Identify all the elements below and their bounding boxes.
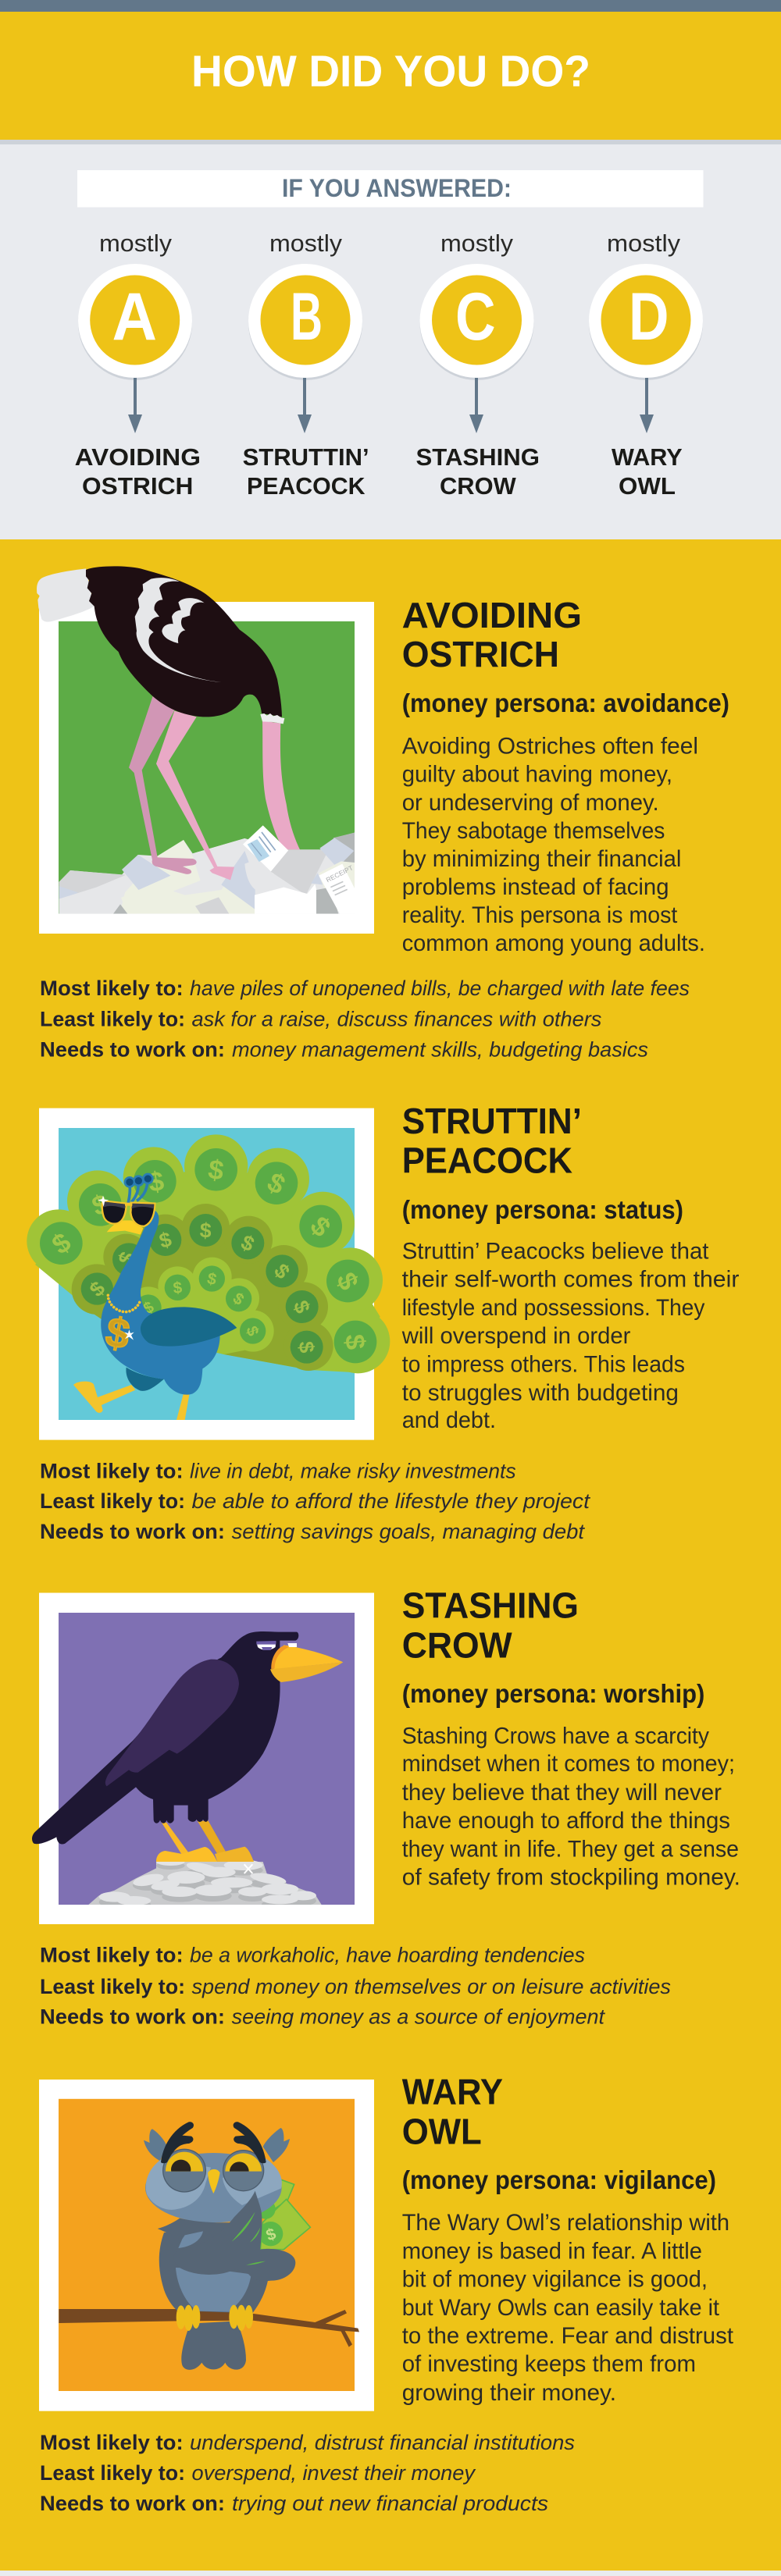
- traits list: [40, 1460, 591, 1543]
- wing: [105, 1660, 239, 1786]
- description: but Wary Owls can easily take it: [402, 2295, 720, 2321]
- beak: [270, 1645, 343, 1682]
- body: [32, 1631, 298, 1845]
- traits list: trying out new financial products: [232, 2492, 548, 2515]
- tail fan: $: [339, 1333, 371, 1350]
- gold chain: [102, 1295, 140, 1358]
- branch: [59, 2309, 359, 2347]
- illustration: crow on coin pile: [32, 1631, 343, 1909]
- beak: [107, 1220, 143, 1235]
- persona name: [402, 1585, 579, 1666]
- answer column D: [589, 229, 703, 500]
- body: [86, 566, 282, 717]
- crest: [124, 1173, 154, 1204]
- photo frame: crow: [39, 1592, 374, 1924]
- traits list: ask for a raise, discuss finances with others: [192, 1007, 601, 1030]
- traits list: Least likely to:: [40, 1007, 185, 1030]
- description: [402, 2210, 734, 2406]
- raised wing: [173, 2191, 295, 2281]
- answer column B: B: [291, 279, 323, 354]
- description: of safety from stockpiling money.: [402, 1865, 740, 1891]
- photo frame: owl: [39, 2080, 374, 2411]
- persona type: (money persona: worship): [402, 1679, 704, 1708]
- description: to the extreme. Fear and distrust: [402, 2323, 734, 2349]
- traits list: be able to afford the lifestyle they project: [192, 1489, 591, 1513]
- traits list: Most likely to:: [40, 977, 184, 1000]
- traits list: Needs to work on:: [40, 2005, 225, 2029]
- traits list: overspend, invest their money: [192, 2461, 476, 2485]
- body: [159, 2225, 276, 2313]
- panel: wary owl: [39, 2072, 734, 2515]
- panel: avoiding ostrich: [37, 566, 729, 1062]
- description: guilty about having money,: [402, 761, 672, 787]
- photo frame: peacock: [39, 1108, 374, 1440]
- sparkle: [244, 1864, 252, 1873]
- description: lifestyle and possessions. They: [402, 1295, 704, 1321]
- tail fan: $: [88, 1188, 112, 1222]
- traits list: seeing money as a source of enjoyment: [232, 2005, 605, 2029]
- description: [402, 1724, 740, 1891]
- answer column B: [243, 229, 369, 500]
- sunglasses: [98, 1196, 155, 1226]
- description: or undeserving of money.: [402, 790, 659, 816]
- money bills: $: [264, 2225, 279, 2245]
- answer column C: [415, 229, 540, 500]
- answer column B: mostly: [269, 229, 343, 257]
- green background: [59, 621, 355, 913]
- description: Avoiding Ostriches often feel: [402, 733, 698, 759]
- answer column A: [75, 229, 201, 500]
- traits list: Needs to work on:: [40, 1520, 225, 1543]
- description: common among young adults.: [402, 930, 705, 956]
- legs and feet: [156, 1821, 254, 1862]
- blue background: [59, 1128, 355, 1420]
- traits list: have piles of unopened bills, be charged with late fees: [190, 977, 690, 1000]
- persona type: (money persona: avoidance): [402, 688, 729, 717]
- answer column C: mostly: [440, 229, 514, 257]
- persona name: [402, 595, 582, 674]
- top band: [0, 0, 781, 12]
- description: money is based in fear. A little: [402, 2238, 702, 2264]
- talons: [177, 2305, 253, 2331]
- traits list: spend money on themselves or on leisure activities: [192, 1975, 671, 1998]
- description: they want in life. They get a sense: [402, 1837, 739, 1863]
- persona name: STASHING: [402, 1585, 579, 1626]
- photo frame: ostrich: [39, 602, 374, 934]
- traits list: Most likely to:: [40, 2431, 184, 2454]
- persona name: WARY: [402, 2072, 503, 2112]
- tail fan: $: [47, 1227, 77, 1261]
- traits list: [40, 2431, 575, 2515]
- chest feathers: [158, 2218, 258, 2248]
- persona name: OWL: [402, 2111, 482, 2151]
- traits list: Most likely to:: [40, 1460, 184, 1483]
- description: their self-worth comes from their: [402, 1267, 739, 1293]
- persona name: STRUTTIN’: [402, 1101, 582, 1141]
- brows: [161, 2122, 194, 2163]
- traits list: Least likely to:: [40, 1489, 185, 1513]
- traits list: underspend, distrust financial institutions: [190, 2431, 575, 2454]
- traits list: [40, 1944, 671, 2029]
- description: to struggles with budgeting: [402, 1380, 679, 1406]
- description: reality. This persona is most: [402, 902, 678, 928]
- traits list: Least likely to:: [40, 1975, 185, 1998]
- tail fan: $: [262, 1167, 290, 1201]
- bottom strip: [0, 2571, 781, 2576]
- wing feathers: [135, 578, 221, 682]
- eye right: [223, 2150, 264, 2191]
- wing: [141, 1307, 237, 1347]
- tail fan: [27, 1134, 390, 1373]
- tail fan: $: [289, 1297, 315, 1316]
- coin pile: [89, 1861, 322, 1905]
- traits list: be a workaholic, have hoarding tendencies: [190, 1944, 585, 1967]
- description: Struttin’ Peacocks believe that: [402, 1239, 709, 1265]
- answer column C: CROW: [440, 472, 516, 500]
- answer column B: STRUTTIN’: [243, 443, 369, 471]
- description: will overspend in order: [401, 1323, 630, 1349]
- description: they believe that they will never: [402, 1780, 722, 1806]
- persona type: (money persona: vigilance): [402, 2165, 716, 2194]
- description: problems instead of facing: [402, 874, 669, 900]
- persona name: AVOIDING: [402, 595, 582, 635]
- money bills: [251, 2172, 310, 2250]
- traits list: Least likely to:: [40, 2461, 185, 2485]
- tail fan: $: [294, 1340, 319, 1354]
- heading bar: if you answered: IF YOU ANSWERED:: [282, 174, 512, 202]
- description: bit of money vigilance is good,: [402, 2267, 708, 2293]
- traits list: money management skills, budgeting basics: [232, 1038, 648, 1062]
- ears: [144, 2129, 166, 2161]
- description: have enough to afford the things: [402, 1808, 730, 1834]
- tail fan: $: [230, 1290, 248, 1309]
- description: [401, 1239, 739, 1433]
- legs: [73, 1382, 135, 1413]
- answer column D: OWL: [619, 472, 676, 500]
- illustration: peacock with sunglasses: [27, 1134, 390, 1420]
- persona type: (money persona: status): [402, 1195, 683, 1224]
- paper pile: RECEIPT: [325, 863, 355, 884]
- description: They sabotage themselves: [402, 818, 665, 844]
- description: of investing keeps them from: [402, 2351, 696, 2377]
- tail fan: $: [173, 1279, 184, 1297]
- tail fan: $: [157, 1227, 174, 1253]
- description: to impress others. This leads: [402, 1352, 685, 1378]
- answer column C: C: [455, 279, 496, 354]
- illustration: owl holding money: [59, 2122, 359, 2370]
- tail fan: $: [237, 1230, 258, 1256]
- description: and debt.: [402, 1407, 496, 1433]
- title banner: [0, 12, 781, 144]
- answer column A: A: [112, 279, 157, 354]
- tail fan: $: [147, 1165, 166, 1198]
- tail fan: $: [113, 1249, 140, 1268]
- answer column D: mostly: [607, 229, 681, 257]
- answer column D: WARY: [612, 443, 683, 471]
- tail feathers: [37, 568, 95, 622]
- description: by minimizing their financial: [402, 846, 681, 872]
- traits list: live in debt, make risky investments: [190, 1460, 516, 1483]
- traits list: Needs to work on:: [40, 1038, 225, 1062]
- traits list: setting savings goals, managing debt: [232, 1520, 586, 1543]
- answer column D: D: [629, 279, 669, 354]
- description: Stashing Crows have a scarcity: [402, 1724, 709, 1749]
- panel: stashing crow: [32, 1585, 740, 2029]
- tail: [181, 2321, 246, 2370]
- eye left: [162, 2149, 206, 2193]
- paper pile: [243, 825, 355, 914]
- heading bar: if you answered: [77, 170, 703, 208]
- persona name: OSTRICH: [402, 634, 559, 674]
- traits list: Most likely to:: [40, 1944, 184, 1967]
- head: [145, 2149, 282, 2222]
- persona name: [402, 1101, 582, 1180]
- answer column A: mostly: [99, 229, 173, 257]
- tail fan: $: [199, 1219, 212, 1243]
- description: The Wary Owl’s relationship with: [402, 2210, 729, 2236]
- orange background: [59, 2099, 355, 2391]
- tail fan: $: [330, 1268, 364, 1294]
- answer column C: STASHING: [415, 443, 540, 471]
- panel: struttin peacock: [27, 1101, 739, 1543]
- persona name: CROW: [402, 1625, 512, 1666]
- title: HOW DID YOU DO?: [191, 47, 590, 97]
- tail fan: $: [269, 1259, 294, 1283]
- description: mindset when it comes to money;: [402, 1751, 735, 1777]
- tail fan: $: [242, 1324, 262, 1339]
- body: [101, 1210, 220, 1395]
- tail fan: $: [85, 1276, 110, 1301]
- answer column B: PEACOCK: [247, 472, 366, 500]
- description: [402, 733, 705, 956]
- tail fan: $: [141, 1298, 158, 1318]
- back leg: [129, 696, 197, 874]
- persona name: PEACOCK: [402, 1140, 572, 1180]
- gold chain: $: [102, 1309, 133, 1358]
- persona name: [402, 2072, 503, 2151]
- tail fan: $: [205, 1269, 219, 1289]
- illustration: ostrich with head in bills: [37, 566, 355, 914]
- tail fan: $: [304, 1211, 337, 1243]
- neck collar: [260, 713, 284, 724]
- answer column A: AVOIDING: [75, 443, 201, 471]
- traits list: [40, 977, 690, 1062]
- description: growing their money.: [402, 2380, 616, 2406]
- eye: [256, 1641, 297, 1650]
- neck: [262, 720, 300, 849]
- panel: answer key: [0, 144, 781, 539]
- purple background: [59, 1613, 355, 1905]
- front leg: [156, 711, 234, 880]
- answer column A: OSTRICH: [82, 472, 193, 500]
- traits list: Needs to work on:: [40, 2492, 225, 2515]
- tail fan: $: [206, 1154, 226, 1187]
